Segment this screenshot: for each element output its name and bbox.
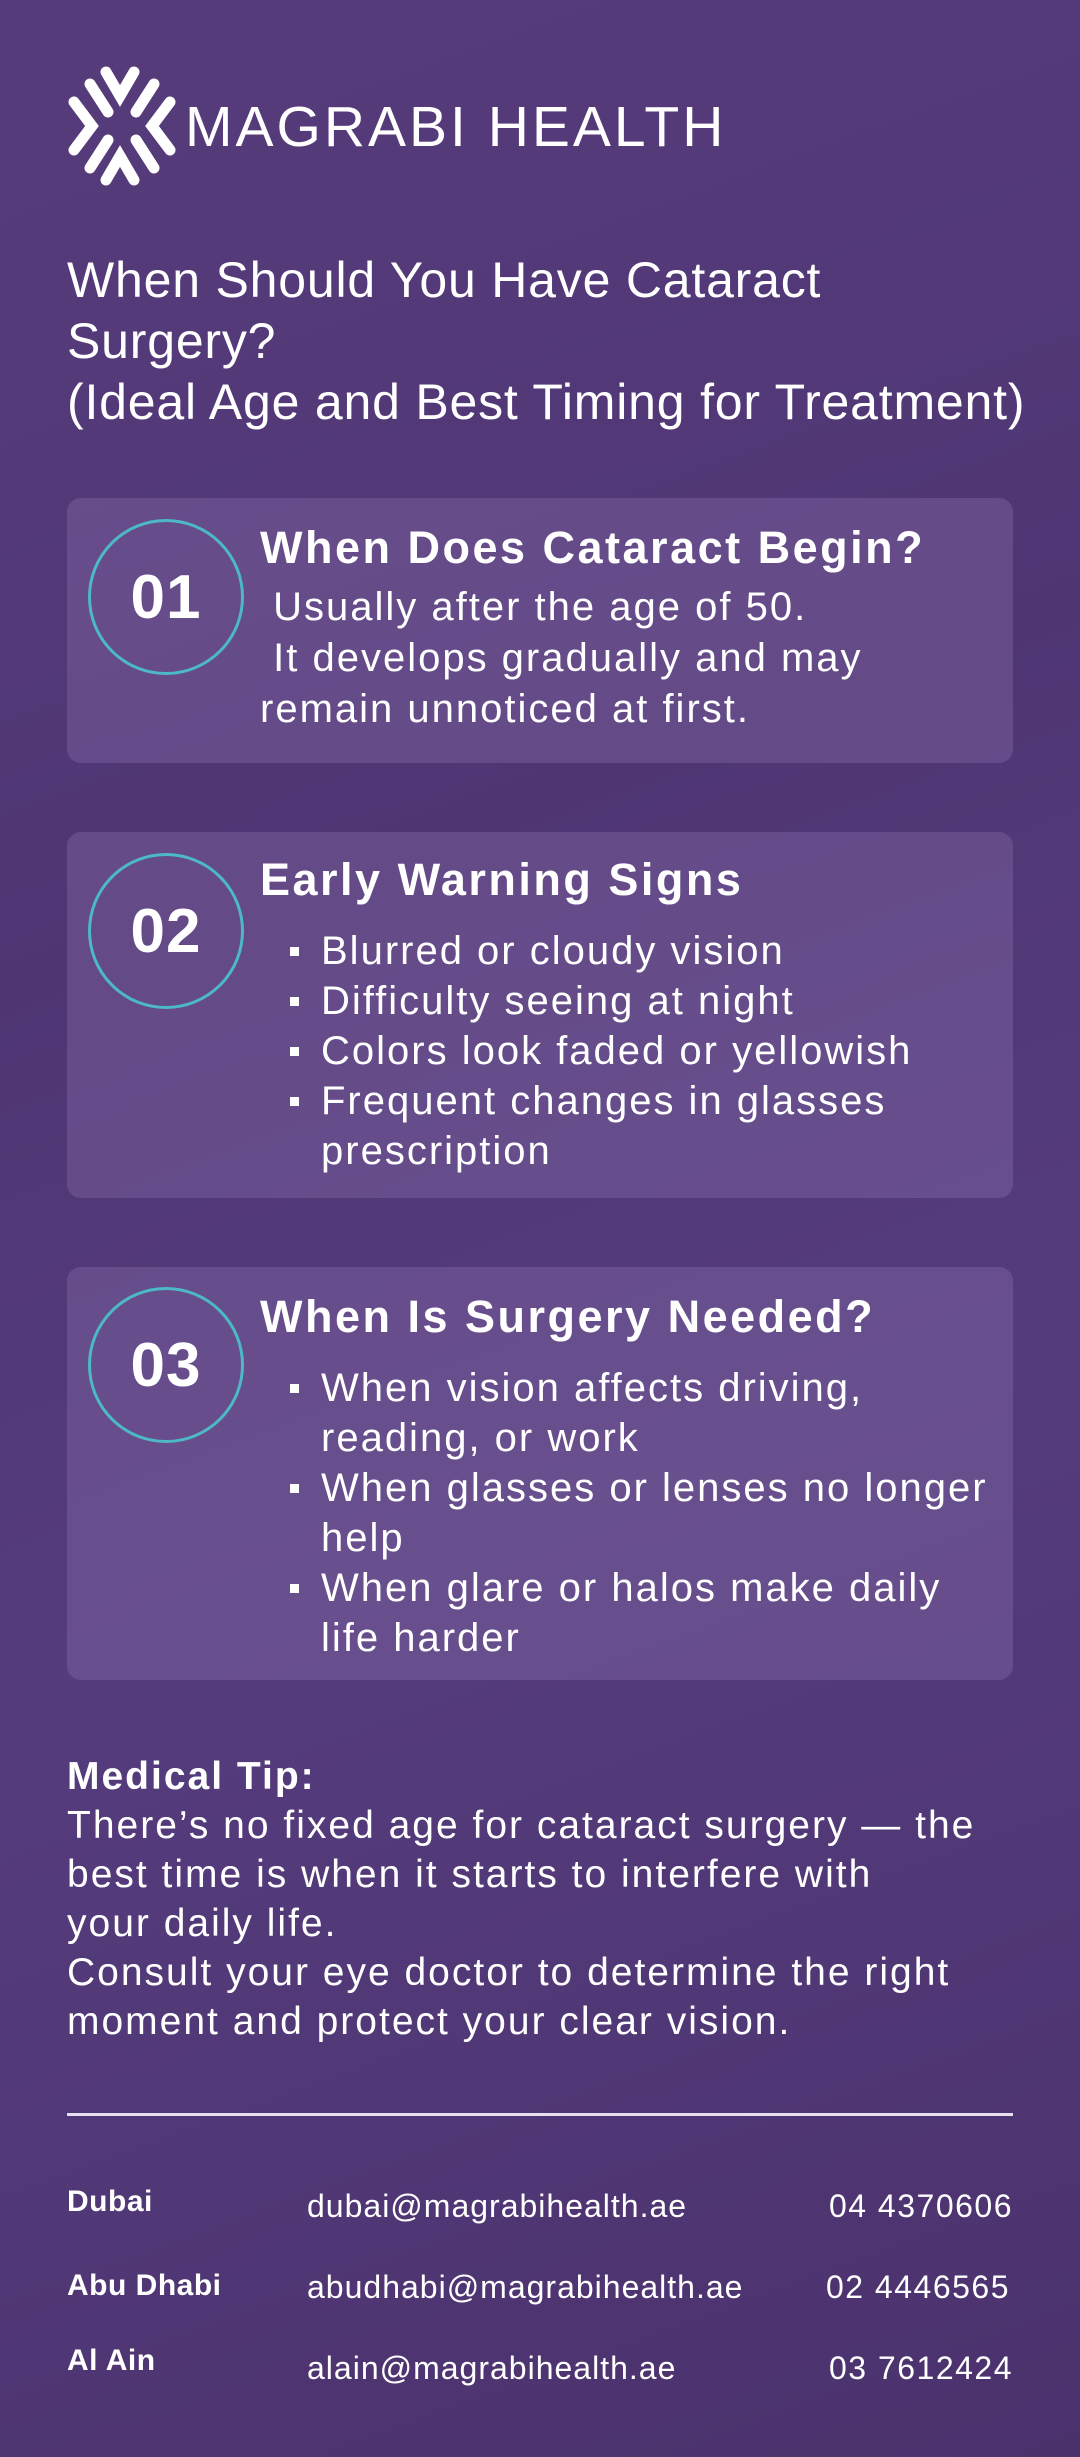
title <box>67 252 1025 430</box>
bullet list <box>290 929 912 1173</box>
panel: 02 early warning signs <box>67 832 1013 1198</box>
body text <box>260 585 863 731</box>
medical tip: best time is when it starts to interfere with <box>67 1853 872 1896</box>
title: When Should You Have Cataract <box>67 252 821 308</box>
contacts: Al Ain <box>67 2344 156 2377</box>
medical tip: your daily life. <box>67 1902 337 1945</box>
contacts: Dubai <box>67 2185 153 2218</box>
title: Surgery? <box>67 313 276 369</box>
medical tip: Medical Tip: <box>67 1755 316 1798</box>
bullet list: When glare or halos make daily <box>321 1566 941 1610</box>
bullet list: life harder <box>321 1616 521 1660</box>
contacts: alain@magrabihealth.ae <box>307 2350 676 2386</box>
heading: When Does Cataract Begin? <box>260 522 925 573</box>
number badge 02: 02 <box>131 896 201 966</box>
bullet list: When glasses or lenses no longer <box>321 1466 988 1510</box>
bullet list: Difficulty seeing at night <box>321 979 795 1023</box>
contacts: dubai@magrabihealth.ae <box>307 2188 687 2224</box>
bullet list: prescription <box>321 1129 552 1173</box>
contacts: 04 4370606 <box>829 2188 1013 2224</box>
heading: Early Warning Signs <box>260 854 743 905</box>
bullet list: When vision affects driving, <box>321 1366 863 1410</box>
contacts: 03 7612424 <box>829 2350 1013 2386</box>
contacts: 02 4446565 <box>826 2269 1010 2305</box>
brand name: MAGRABI HEALTH <box>185 95 726 159</box>
bullet list: reading, or work <box>321 1416 640 1460</box>
icon: logo mark <box>68 66 176 186</box>
medical tip: There’s no fixed age for cataract surgery — the <box>67 1804 975 1847</box>
medical tip: moment and protect your clear vision. <box>67 2000 791 2043</box>
medical tip: Consult your eye doctor to determine the right <box>67 1951 950 1994</box>
number badge 03: 03 <box>131 1330 201 1400</box>
contacts: abudhabi@magrabihealth.ae <box>307 2269 743 2305</box>
title: (Ideal Age and Best Timing for Treatment) <box>67 374 1025 430</box>
bullet list: help <box>321 1516 405 1560</box>
number badge 01: 01 <box>131 562 201 632</box>
number badge 02 <box>88 853 244 1009</box>
bullet list: Blurred or cloudy vision <box>321 929 785 973</box>
number badge 03 <box>88 1287 244 1443</box>
body text: remain unnoticed at first. <box>260 687 750 731</box>
body text: It develops gradually and may <box>273 636 863 680</box>
medical tip <box>67 1755 975 2043</box>
contacts <box>67 2185 1013 2386</box>
bullet list: Colors look faded or yellowish <box>321 1029 912 1073</box>
panel: 01 when does cataract begin <box>67 498 1013 763</box>
contacts: Abu Dhabi <box>67 2269 222 2302</box>
body text: Usually after the age of 50. <box>273 585 807 629</box>
number badge 01 <box>88 519 244 675</box>
heading: When Is Surgery Needed? <box>260 1291 875 1342</box>
logo <box>68 66 726 186</box>
panel: 03 when is surgery needed <box>67 1267 1013 1680</box>
bullet list <box>290 1366 988 1660</box>
bullet list: Frequent changes in glasses <box>321 1079 886 1123</box>
